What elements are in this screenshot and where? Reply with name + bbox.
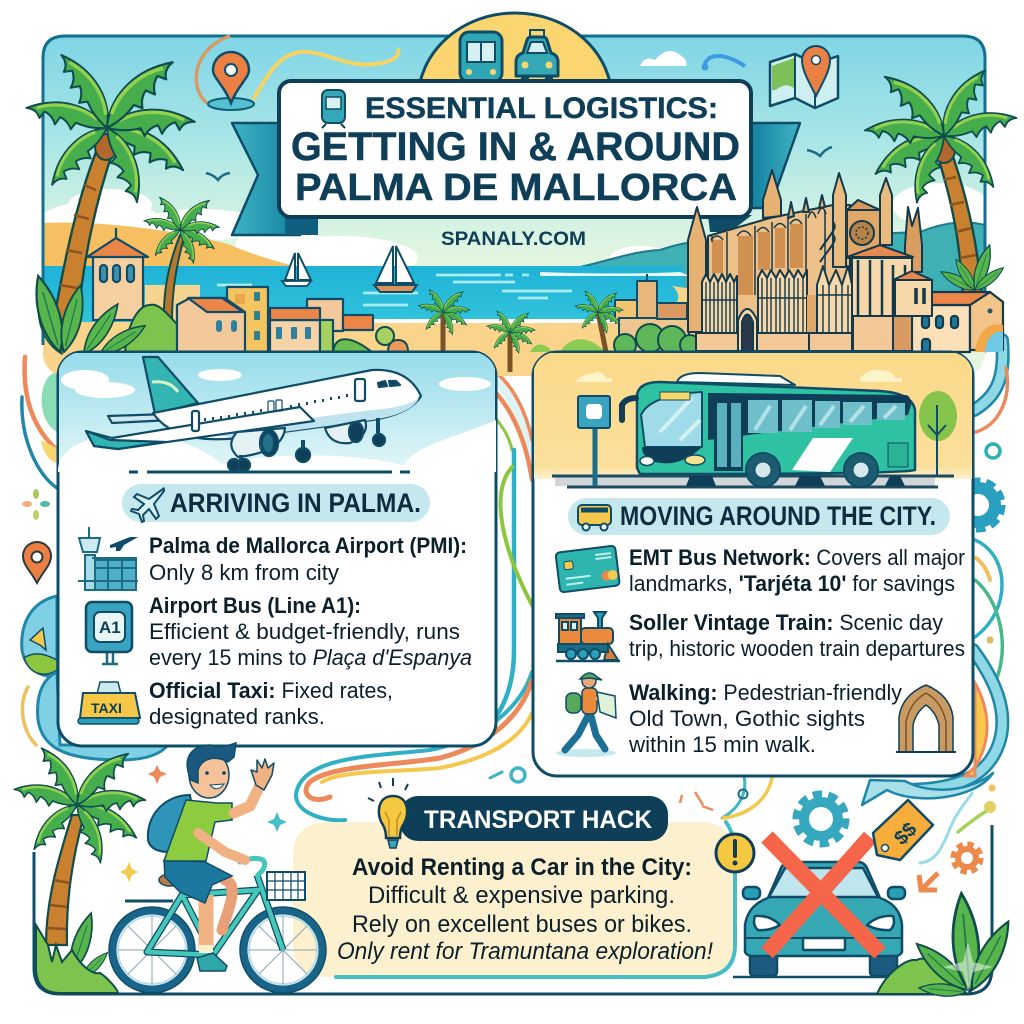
- door: [738, 309, 757, 351]
- price tag: [873, 800, 933, 860]
- bell tower left: [87, 228, 148, 320]
- item: airport: Palma de Mallorca Airport (PMI):: [149, 533, 467, 558]
- title line 1: ESSENTIAL LOGISTICS:: [365, 92, 718, 125]
- top semicircle with transport icons: [418, 13, 612, 100]
- heading pill: [122, 484, 430, 522]
- small palm middle left: [143, 194, 220, 320]
- palm tree bottom left: [12, 742, 146, 945]
- town buildings left: [177, 287, 373, 352]
- icon: walker with map: [556, 673, 616, 757]
- panel: moving around the city: [533, 352, 973, 776]
- base blocks: [696, 333, 852, 351]
- airplane: [86, 357, 421, 471]
- beach palms: [417, 287, 624, 372]
- item: airport: [78, 527, 467, 590]
- sparkles: [120, 765, 748, 882]
- watermark diamond: [943, 942, 993, 992]
- icon: A1 bus stop sign: A1: [99, 618, 121, 637]
- big tropical leaves left: [29, 273, 149, 360]
- item: taxi: designated ranks.: [149, 704, 325, 729]
- icon: title train: [322, 90, 345, 128]
- bicycle: [109, 858, 326, 993]
- small cloud and swirl: [640, 51, 745, 70]
- orange arrow: [919, 873, 938, 890]
- hack heading pill: TRANSPORT HACK: [424, 806, 652, 834]
- palm tree right: [864, 63, 1019, 300]
- car crossed out: [733, 837, 905, 977]
- scenic header background: [35, 36, 1000, 376]
- item: airport bus: every 15 mins to Plaça d'Espanya: [149, 645, 472, 670]
- route lines between and around panels: [22, 340, 1007, 863]
- tree: [919, 391, 957, 475]
- plants bottom left: [36, 911, 118, 993]
- bus scene: [534, 353, 972, 486]
- icon: gothic arch: [896, 685, 956, 752]
- panel: arriving in Palma: [58, 352, 496, 746]
- right side arcs: [974, 340, 1003, 410]
- saddle: [159, 874, 181, 886]
- item: EMT bus network: EMT Bus Network: Covers all major: [629, 545, 965, 570]
- item: EMT bus network: [555, 545, 965, 596]
- item: EMT bus network: landmarks, 'Tarjéta 10' for savings: [629, 571, 955, 596]
- birds: [206, 147, 832, 180]
- icon: exclamation: [716, 834, 754, 872]
- item: airport bus: Airport Bus (Line A1):: [149, 593, 361, 618]
- heading pill: MOVING AROUND THE CITY.: [620, 501, 936, 531]
- ground line: [733, 976, 905, 978]
- item: walking: Walking: Pedestrian-friendly: [629, 680, 902, 705]
- nave wall: [708, 205, 850, 350]
- icon: travel card: [555, 546, 620, 593]
- panel: transport hack: [293, 778, 754, 977]
- item: taxi: [78, 678, 393, 729]
- item: walking: [556, 673, 956, 757]
- icon: light bulb: [368, 778, 408, 848]
- apse: [852, 258, 912, 316]
- front arm: [198, 833, 245, 860]
- title line 2: GETTING IN & AROUND: [291, 125, 740, 169]
- hair: [187, 743, 236, 783]
- ring and dots right: [984, 444, 1000, 813]
- icon: gear: [797, 795, 845, 843]
- item: taxi: Official Taxi: Fixed rates,: [149, 678, 393, 703]
- icon: airport tower and terminal: [78, 527, 138, 590]
- website label: SPANALY.COM: [441, 229, 586, 250]
- small orange gear: [954, 845, 980, 871]
- beach: [43, 286, 700, 376]
- title ribbon: [232, 123, 800, 235]
- bushes near town: [333, 327, 408, 352]
- green bush left: [125, 305, 243, 352]
- hack text: Rely on excellent buses or bikes.: [352, 911, 692, 938]
- far town near cathedral: [615, 274, 689, 352]
- sand hills: [43, 223, 300, 267]
- plants on the right: [939, 243, 1006, 294]
- heading pill: [568, 498, 950, 535]
- runway line: [129, 470, 410, 474]
- road: [552, 476, 954, 487]
- small tower: [895, 280, 932, 316]
- raised arm: [234, 785, 260, 813]
- hack text: Only rent for Tramuntana exploration!: [337, 938, 713, 965]
- hack text: Avoid Renting a Car in the City:: [352, 854, 692, 881]
- item: Soller vintage train: [556, 610, 965, 661]
- item: walking: Old Town, Gothic sights: [629, 706, 865, 731]
- head: [189, 752, 229, 798]
- front leg: [198, 895, 214, 948]
- icon: train: [459, 32, 503, 90]
- shorts: [164, 860, 232, 903]
- gothic window groups: [702, 274, 737, 333]
- plants bottom right: [877, 892, 1017, 998]
- title line 3: PALMA DE MALLORCA: [295, 167, 737, 209]
- icon: A1 bus stop sign: [86, 602, 132, 664]
- map pin with route: [196, 36, 398, 110]
- hack text: Difficult & expensive parking.: [368, 882, 675, 909]
- icon: taxi roof sign: [78, 682, 140, 724]
- house right: [911, 292, 1003, 352]
- far hills: [580, 222, 984, 291]
- folded map icon: [770, 46, 838, 108]
- hack heading pill: [400, 796, 668, 841]
- bus: [622, 373, 915, 487]
- icon: steam locomotive: [556, 612, 620, 661]
- item: airport bus: Efficient & budget-friendly, runs: [149, 619, 460, 644]
- waving hand: [251, 759, 274, 790]
- cyclist on bicycle: [109, 743, 326, 993]
- left side arcs: [25, 357, 57, 450]
- hack text: [337, 854, 713, 965]
- clouds: [44, 183, 984, 266]
- swoosh blobs at page edges: [22, 596, 993, 805]
- back leg: [222, 880, 232, 930]
- heading pill: ARRIVING IN PALMA.: [170, 488, 421, 518]
- item: airport: Only 8 km from city: [149, 560, 339, 585]
- green bushes by beach: [530, 324, 700, 356]
- gear behind right panel: [955, 482, 1001, 528]
- price tag: $$: [890, 818, 921, 850]
- icon: small bus: [578, 505, 611, 530]
- cathedral: [688, 170, 932, 351]
- icon: taxi roof sign: TAXI: [91, 700, 122, 716]
- frame outline bottom: [34, 825, 992, 994]
- item: Soller vintage train: Soller Vintage Train: Scenic day: [629, 610, 943, 635]
- car: [743, 862, 905, 976]
- palm tree left: [24, 47, 196, 320]
- spires: [688, 207, 706, 332]
- icon: bus stop: [578, 396, 610, 486]
- icon: taxi: [516, 30, 558, 83]
- red cross: [767, 837, 880, 953]
- sailboats: [282, 246, 417, 292]
- item: walking: within 15 min walk.: [628, 732, 816, 757]
- item: airport bus: [86, 593, 472, 670]
- title box: [279, 81, 751, 217]
- sea: [43, 266, 683, 323]
- plane sky: [58, 353, 496, 472]
- item: Soller vintage train: trip, historic wooden train departures: [629, 636, 965, 661]
- frame outline top: [43, 36, 985, 345]
- backpack: [148, 795, 198, 852]
- sparkle dots left: [22, 489, 50, 520]
- map pin left: [23, 542, 51, 583]
- torso: [164, 800, 232, 861]
